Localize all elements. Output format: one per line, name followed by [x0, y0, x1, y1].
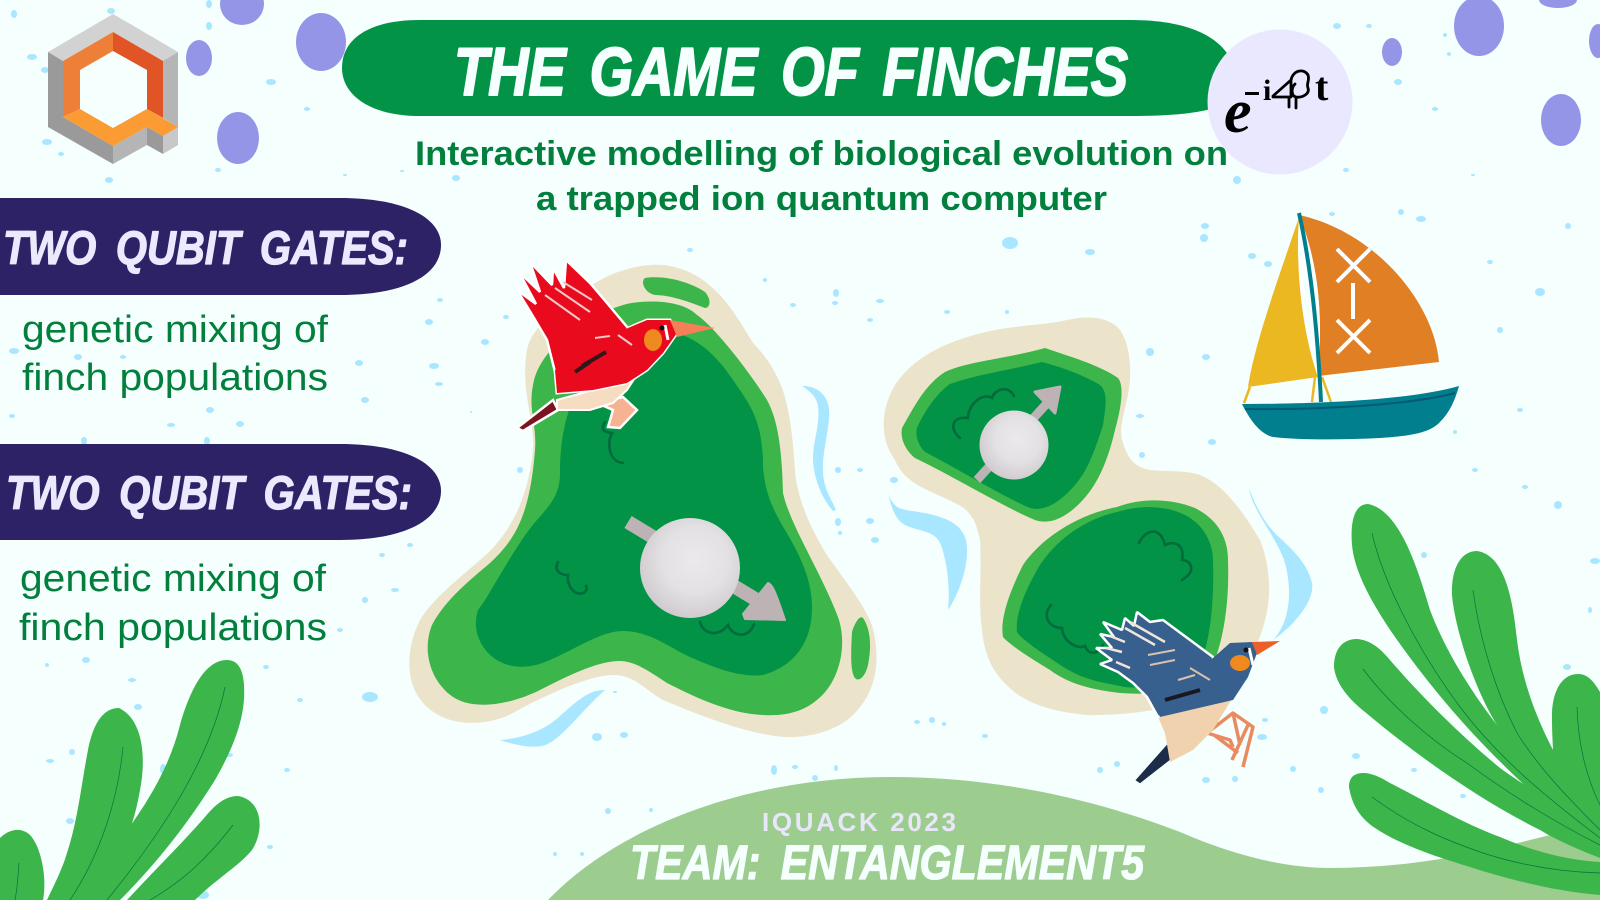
spin arrow [628, 522, 765, 605]
cheek [1230, 655, 1250, 671]
upper island forest [916, 362, 1106, 509]
jib sail [1248, 217, 1318, 387]
twin islands [884, 317, 1269, 715]
formula badge [1208, 30, 1352, 174]
right leaves [1334, 504, 1600, 895]
wing streaks [1106, 622, 1210, 700]
gate description: finch populations [22, 357, 328, 399]
forest [476, 330, 812, 676]
gate description: genetic mixing of [22, 309, 328, 351]
footer text [630, 807, 1145, 890]
left leaves [0, 660, 260, 900]
belly [557, 370, 640, 410]
tail [1137, 745, 1172, 782]
wing streaks [545, 282, 632, 372]
blue finch [1096, 612, 1280, 782]
formula: e to the minus i finch t: i [1263, 74, 1271, 107]
leaf veins [1363, 533, 1600, 873]
subtitle: a trapped ion quantum computer [536, 180, 1107, 218]
legs [1207, 713, 1253, 767]
mast [1299, 213, 1321, 402]
sailboat [1242, 213, 1459, 439]
formula: e to the minus i finch t: e [1224, 78, 1252, 146]
footer text: IQUACK 2023 [762, 807, 956, 837]
legs [597, 397, 637, 428]
gate heading: TWO QUBIT GATES: [6, 466, 412, 519]
purple dots [186, 0, 1600, 164]
grass patches [643, 277, 710, 308]
grass rim [428, 301, 842, 715]
title banner [342, 20, 1232, 116]
spin arrow [977, 400, 1050, 480]
logo: hexagonal Q [48, 14, 178, 164]
large island [409, 265, 876, 737]
wing and body [555, 320, 677, 393]
white gap [1298, 217, 1320, 377]
main sail [1299, 215, 1439, 376]
tree outlines [557, 422, 754, 635]
red finch [517, 260, 715, 431]
ion sphere [640, 518, 740, 618]
ion sphere [980, 410, 1048, 480]
water swirls [500, 386, 1312, 747]
panel: two qubit gates, second [0, 444, 441, 649]
background hill [548, 777, 1600, 900]
eye [665, 325, 668, 340]
lower island forest [1017, 507, 1213, 688]
head and body [1150, 642, 1257, 717]
lower island grass [1002, 500, 1228, 694]
eye [1249, 648, 1253, 665]
gate symbol [1337, 249, 1370, 353]
sand [409, 265, 876, 737]
tail [517, 400, 558, 431]
panel: two qubit gates, first [0, 198, 441, 399]
tree outlines on twin islands [953, 389, 1191, 653]
team name: TEAM: ENTANGLEMENT5 [630, 837, 1145, 890]
ropes [1244, 377, 1331, 403]
cheek [644, 329, 662, 351]
gate description: genetic mixing of [20, 558, 326, 600]
gate description [22, 309, 328, 399]
gate description [19, 558, 327, 649]
wing [1096, 612, 1213, 717]
qubit spin: large island [628, 518, 785, 620]
formula: e to the minus i finch t: t [1315, 64, 1329, 109]
hull [1242, 386, 1459, 439]
subtitle: Interactive modelling of biological evolution on [415, 135, 1228, 173]
beak [1252, 641, 1280, 655]
sand [884, 317, 1269, 715]
upper island grass [902, 348, 1122, 522]
leaf veins [15, 687, 233, 900]
subtitle [415, 135, 1228, 218]
belly [1158, 697, 1233, 762]
gate description: finch populations [19, 607, 327, 649]
qubit spin: upper island [977, 387, 1060, 480]
formula: e to the minus i finch t [1224, 64, 1329, 146]
beak [670, 320, 715, 337]
title text: THE GAME OF FINCHES [454, 34, 1128, 110]
gate heading: TWO QUBIT GATES: [3, 221, 408, 274]
